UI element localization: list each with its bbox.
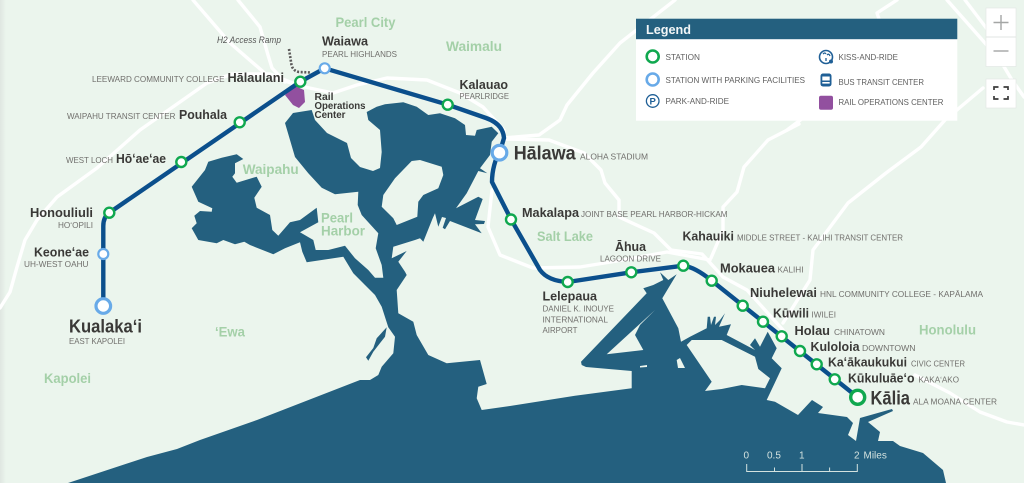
place: Pearl City: Pearl City (336, 14, 396, 30)
rail operations center site (285, 86, 305, 108)
water: Pearl Harbor and Pacific coastline (68, 102, 946, 483)
label: Lelepaua: AIRPORT (542, 325, 578, 335)
H2 access ramp dotted line (289, 49, 311, 72)
label: Lelepaua (542, 290, 614, 335)
label: Hālaulani: Hālaulani (228, 71, 284, 85)
label: Kūkuluāeʻo: Kūkuluāeʻo (848, 372, 915, 386)
station: Keoneʻae (98, 249, 108, 259)
legend: park-and-ride: P (650, 96, 657, 108)
label: Kuloloia (810, 340, 916, 354)
scale bar: 0.5 (767, 450, 781, 462)
label: Honouliuli: HOʻOPILI (58, 220, 93, 230)
stations (96, 63, 865, 404)
label: Pouhala: WAIPAHU TRANSIT CENTER (67, 111, 176, 121)
station: Honouliuli (104, 208, 114, 218)
icon: zoom out (994, 50, 1008, 52)
water: small inlet (366, 327, 387, 361)
label: Waiawa (322, 34, 397, 59)
scale bar (744, 450, 887, 472)
label: Kualakaʻi (69, 317, 142, 346)
legend: rail operations center: RAIL OPERATIONS CENTER (838, 97, 944, 107)
station: Kuloloia (795, 346, 805, 356)
label: Honouliuli: Honouliuli (30, 206, 93, 220)
label: Makalapa (522, 206, 728, 220)
label: Kuloloia: DOWNTOWN (862, 343, 916, 353)
label: Waiawa: Waiawa (322, 34, 369, 48)
label: Rail Operations Center (314, 92, 366, 121)
station: Hōʻaeʻae (176, 157, 186, 167)
label: Lelepaua: DANIEL K. INOUYE (542, 304, 614, 314)
place names (44, 14, 976, 386)
label: Holau: CHINATOWN (834, 327, 885, 337)
station: Kalauao (443, 100, 453, 110)
legend: park-and-ride: PARK-AND-RIDE (666, 96, 729, 106)
label: Kahauiki: MIDDLE STREET - KALIHI TRANSIT CENTER (737, 232, 903, 242)
station: Āhua (626, 267, 636, 277)
label: Keoneʻae: Keoneʻae (34, 246, 89, 260)
label: Hōʻaeʻae: Hōʻaeʻae (116, 152, 166, 166)
legend: station: STATION (666, 52, 700, 62)
station: Kūkuluāeʻo (830, 374, 840, 384)
station: Hālawa (492, 145, 507, 160)
label: Kūkuluāeʻo: KAKAʻAKO (918, 375, 959, 385)
station: Holau (777, 331, 787, 341)
place: Kapolei: Kapolei (44, 370, 91, 386)
label: Niuhelewai: Niuhelewai (750, 286, 817, 300)
label: Kālia: ALA MOANA CENTER (913, 396, 997, 406)
station: Kahauiki (678, 261, 688, 271)
label: Rail Operations Center: Operations (314, 101, 366, 112)
zoom controls (986, 8, 1016, 66)
place: Salt Lake: Salt Lake (537, 228, 593, 244)
legend: kiss-and-ride (820, 50, 898, 64)
label: Pouhala (67, 108, 228, 122)
scale bar: 0 (744, 450, 750, 462)
label: Kualakaʻi: EAST KAPOLEI (69, 336, 125, 346)
label: Kūkuluāeʻo (848, 372, 959, 386)
label: Rail Operations Center: Center (314, 110, 346, 121)
label: Pouhala: Pouhala (179, 108, 228, 122)
label: H2 Access Ramp: H2 Access Ramp (217, 35, 281, 45)
legend: rail operations center (819, 96, 944, 110)
label: Mokauea: Mokauea (720, 262, 776, 276)
scale bar: Miles (864, 450, 887, 462)
label: Lelepaua: Lelepaua (542, 290, 598, 304)
legend: station (647, 50, 700, 62)
label: Hālaulani: LEEWARD COMMUNITY COLLEGE (92, 74, 225, 84)
label: Niuhelewai: HNL COMMUNITY COLLEGE - KAPĀLAMA (820, 289, 983, 299)
label: Hālawa: Hālawa (514, 144, 576, 164)
rail line (103, 68, 858, 397)
label: Kālia (870, 388, 997, 409)
legend header: Legend (646, 22, 691, 37)
place: Honolulu: Honolulu (919, 322, 976, 338)
place: Waimalu: Waimalu (446, 38, 502, 54)
station: Kūwili (758, 317, 768, 327)
label: Kalauao: PEARLRIDGE (460, 91, 509, 101)
label: Makalapa: Makalapa (522, 206, 580, 220)
legend: park-and-ride (646, 95, 729, 108)
label: Hōʻaeʻae: WEST LOCH (66, 155, 113, 165)
station: Kaʻākaukukui (812, 359, 822, 369)
label: Āhua (600, 240, 661, 264)
scale bar: 1 (799, 450, 805, 462)
label: Kūwili: Kūwili (773, 307, 809, 321)
label: Lelepaua: INTERNATIONAL (542, 314, 608, 324)
label: Kaʻākaukukui (828, 356, 965, 370)
station: Makalapa (506, 214, 516, 224)
label: Niuhelewai (750, 286, 983, 300)
label: Mokauea (720, 262, 804, 276)
legend: station with parking: STATION WITH PARKING FACILITIES (666, 75, 805, 85)
station: Pouhala (235, 117, 245, 127)
legend: bus transit center (820, 74, 924, 87)
label: Holau: Holau (794, 324, 830, 338)
panel: legend (636, 19, 957, 121)
label: Kūwili: IWILEI (812, 310, 836, 320)
station: Waiawa (320, 63, 330, 73)
label: Kālia: Kālia (870, 388, 910, 409)
station: Niuhelewai (738, 301, 748, 311)
label: Kaʻākaukukui: Kaʻākaukukui (828, 356, 907, 370)
label: Kahauiki: Kahauiki (682, 229, 734, 243)
label: Keoneʻae: UH-WEST OAHU (24, 259, 88, 269)
scale bar: 2 (854, 450, 860, 462)
place: Pearl Harbor: Pearl (321, 210, 353, 226)
label: Honouliuli (30, 206, 93, 230)
station: Lelepaua (563, 277, 573, 287)
label: Waiawa: PEARL HIGHLANDS (322, 49, 397, 59)
station: Kualakaʻi (96, 299, 111, 313)
place: ʻEwa: ʻEwa (215, 324, 245, 340)
label: Hōʻaeʻae (66, 152, 166, 166)
label: Kūwili (773, 307, 836, 321)
label: Āhua: Āhua (615, 240, 647, 254)
label: Holau (794, 324, 885, 338)
label: Hālawa: ALOHA STADIUM (580, 152, 648, 162)
label: Kalauao: Kalauao (460, 78, 508, 92)
fullscreen button (986, 79, 1016, 108)
legend header (636, 19, 957, 39)
station: Hālaulani (295, 77, 305, 87)
label: Hālaulani (92, 71, 284, 85)
station: Kālia (851, 390, 865, 404)
label: Kualakaʻi: Kualakaʻi (69, 317, 142, 337)
labels: station names (24, 34, 997, 409)
place names: Harbor (321, 222, 366, 238)
station: Mokauea (707, 276, 717, 286)
icon: zoom in (994, 15, 1008, 30)
label: Kahauiki (682, 229, 903, 243)
place: Waipahu: Waipahu (243, 161, 299, 177)
label: Kaʻākaukukui: CIVIC CENTER (911, 359, 965, 369)
label: Keoneʻae (24, 246, 89, 269)
label: Kuloloia: Kuloloia (810, 340, 861, 354)
label: Mokauea: KALIHI (778, 265, 804, 275)
label: Kalauao (460, 78, 509, 101)
label: Hālawa (514, 144, 648, 164)
label: Makalapa: JOINT BASE PEARL HARBOR-HICKAM (581, 209, 728, 219)
legend: bus transit center: BUS TRANSIT CENTER (838, 77, 924, 87)
legend: kiss-and-ride: KISS-AND-RIDE (838, 52, 898, 62)
label: Āhua: LAGOON DRIVE (600, 254, 661, 264)
label: Rail Operations Center: Rail (314, 92, 334, 103)
